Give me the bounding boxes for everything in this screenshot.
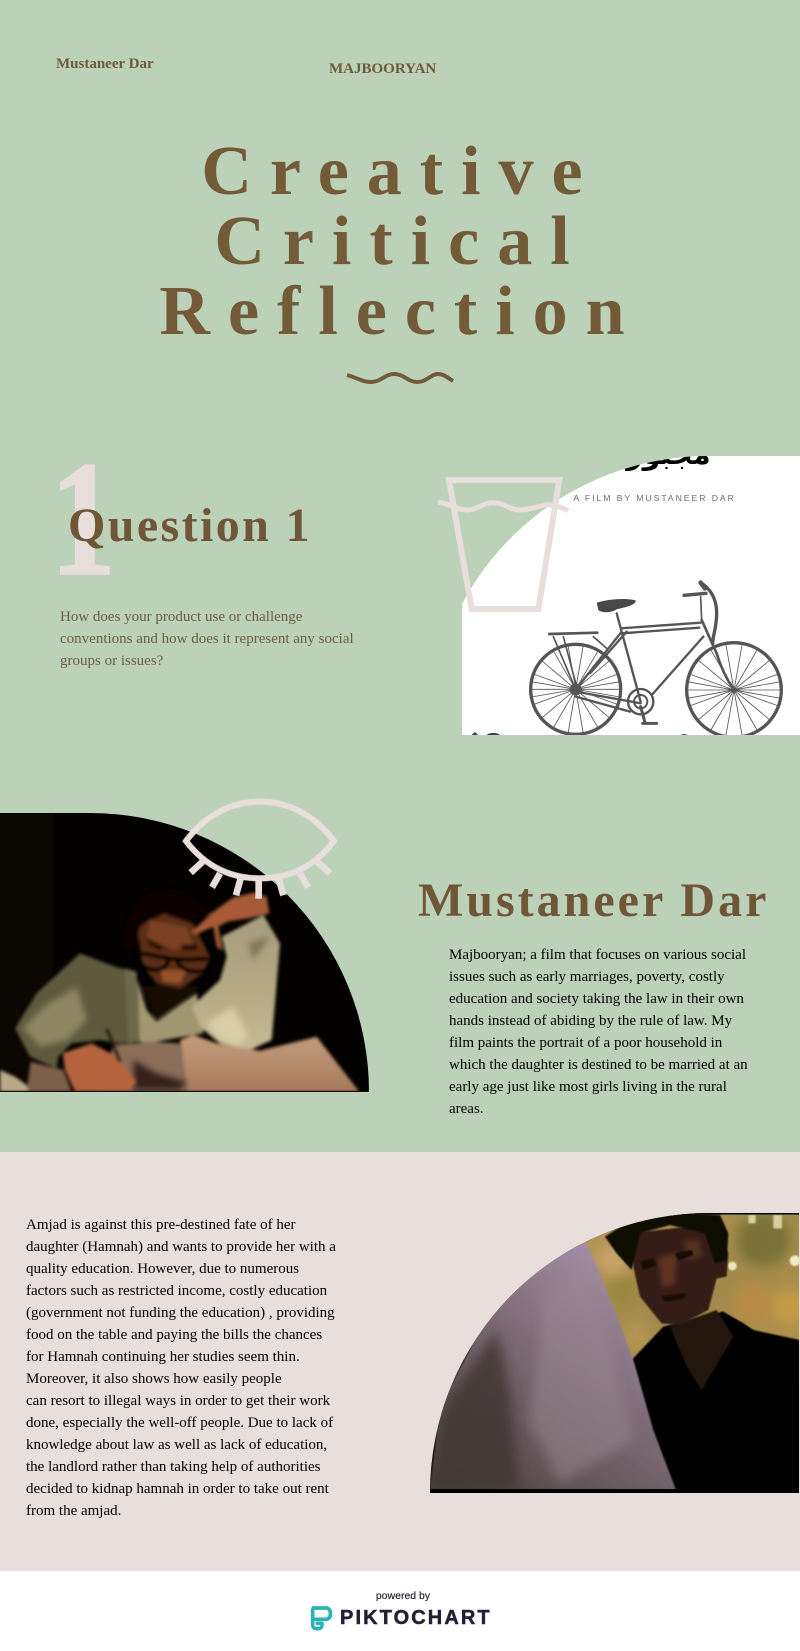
pink background <box>0 1152 800 1571</box>
story description: (government not funding the education) , providing <box>26 1305 335 1321</box>
story description <box>26 1217 336 1519</box>
story description: daughter (Hamnah) and wants to provide her with a <box>26 1239 336 1255</box>
right sleeve <box>192 915 280 1050</box>
logo icon <box>313 1608 330 1629</box>
piktochart wordmark: PIKTOCHART <box>340 1607 492 1629</box>
heading: mustaneer dar: Mustaneer Dar <box>418 874 769 927</box>
story description: the landlord rather than taking help of authorities <box>26 1459 320 1475</box>
film description: Majbooryan; a film that focuses on various social <box>449 947 746 963</box>
film description: film paints the portrait of a poor household in <box>449 1035 722 1051</box>
film name: MAJBOORYAN <box>329 61 436 77</box>
green background <box>0 0 800 1152</box>
author name: Mustaneer Dar <box>56 56 154 72</box>
story description: from the amjad. <box>26 1503 121 1519</box>
story description: factors such as restricted income, costly education <box>26 1283 327 1299</box>
bokeh background <box>580 1214 799 1360</box>
photo top edge <box>681 1213 799 1214</box>
story description: Moreover, it also shows how easily people <box>26 1371 282 1387</box>
neck <box>670 1310 733 1390</box>
icon: closed eye with lashes <box>186 802 334 899</box>
left arm shirt <box>15 953 142 1068</box>
black shirt <box>632 1310 799 1380</box>
chest <box>125 968 140 1043</box>
question text: groups or issues? <box>60 653 163 669</box>
bottom poster fragments <box>472 732 688 735</box>
title: Creative <box>201 133 601 210</box>
hair <box>605 1213 728 1270</box>
question text: How does your product use or challenge <box>60 609 302 625</box>
film description: education and society taking the law in their own <box>449 991 744 1007</box>
story description: for Hamnah continuing her studies seem thin. <box>26 1349 300 1365</box>
face <box>137 913 210 988</box>
hand on forehead <box>191 893 269 951</box>
writing hand <box>63 1043 136 1092</box>
film description: early age just like most girls living in the rural <box>449 1079 727 1095</box>
powered by: powered by <box>376 1590 430 1602</box>
film poster panel with bicycle <box>462 437 800 737</box>
wave divider <box>347 374 453 382</box>
bicycle drawing <box>531 583 781 737</box>
film description: areas. <box>449 1101 484 1117</box>
title: Reflection <box>159 273 643 350</box>
face <box>630 1223 728 1325</box>
photo: man and white sleeve <box>430 1213 800 1493</box>
story description: knowledge about law as well as lack of education, <box>26 1437 327 1453</box>
story description: can resort to illegal ways in order to get their work <box>26 1393 330 1409</box>
title <box>159 133 643 350</box>
glasses <box>135 953 208 972</box>
photo: girl studying <box>0 813 370 1093</box>
neck shadow <box>142 983 200 1020</box>
story description: Amjad is against this pre-destined fate of her <box>26 1217 296 1233</box>
notebook <box>27 1062 72 1092</box>
photo bottom edge <box>430 1489 676 1493</box>
question text: conventions and how does it represent any social <box>60 631 354 647</box>
hair shadow <box>123 889 213 953</box>
story description: food on the table and paying the bills the chances <box>26 1327 322 1343</box>
story description: done, especially the well-off people. Due to lack of <box>26 1415 333 1431</box>
photo bottom edge <box>0 1091 369 1092</box>
film description: hands instead of abiding by the rule of law. My <box>449 1013 732 1029</box>
film description: issues such as early marriages, poverty, costly <box>449 969 725 985</box>
eyes <box>147 940 197 950</box>
story description: quality education. However, due to numerous <box>26 1261 299 1277</box>
section heading: question 1: Question 1 <box>68 499 312 552</box>
title: Critical <box>214 203 588 280</box>
footer background <box>0 1571 800 1651</box>
poster credit: A FILM BY MUSTANEER DAR <box>573 493 736 503</box>
film description: which the daughter is destined to be married at an <box>449 1057 748 1073</box>
blurred sleeve <box>430 1240 676 1490</box>
film description <box>449 947 748 1117</box>
urdu poster title: مجبور.. <box>604 437 711 471</box>
big numeral: 1 <box>50 427 116 610</box>
question text <box>60 609 354 669</box>
story description: decided to kidnap hamnah in order to take out rent <box>26 1481 329 1497</box>
icon: cup of water <box>438 480 568 609</box>
